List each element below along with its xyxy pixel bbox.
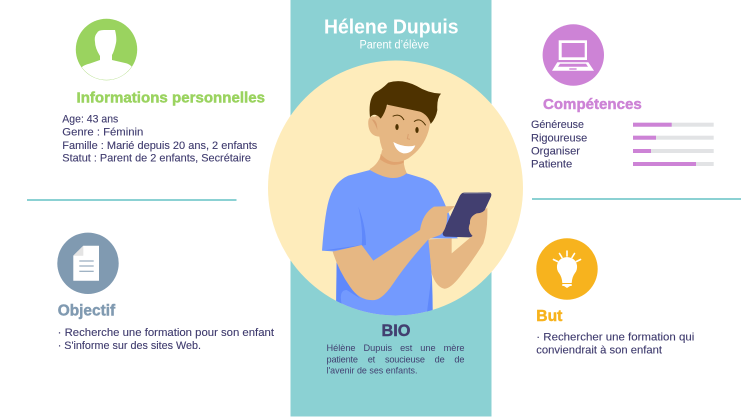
skill rows (531, 119, 714, 171)
tablet (443, 192, 491, 237)
skill: Patiente: Patiente (531, 159, 572, 171)
smile (393, 142, 415, 153)
skill: Organiser: Organiser (531, 146, 580, 158)
left arm (333, 206, 455, 300)
icon: light bulb (536, 238, 598, 300)
text: objective bullets (58, 327, 274, 352)
text: personal details (62, 113, 258, 165)
text: personal details: Statut : Parent de 2 enfants, Secrétaire (62, 153, 251, 165)
text: bio description: Hélène Dupuis est une mère (326, 343, 464, 353)
text: bio description: patiente et soucieuse de de (326, 354, 464, 364)
neck (369, 150, 408, 179)
panel: personal information (62, 19, 265, 165)
panel: central teal column (290, 0, 492, 416)
skill: Généreuse: Généreuse (531, 119, 584, 131)
text: bio description: l'avenir de ses enfants. (326, 366, 418, 376)
illustration: smiling person holding tablet (322, 81, 491, 320)
icon: laptop (543, 24, 604, 86)
eyes and brows (395, 124, 399, 130)
skill: Organiser (531, 146, 714, 158)
text: bio description (326, 343, 464, 376)
panel: goal (536, 238, 694, 357)
skill: Rigoureuse: Rigoureuse (531, 132, 587, 144)
skill: Généreuse (531, 119, 714, 131)
cream portrait circle (268, 60, 523, 316)
text: goal description (536, 332, 694, 357)
text: personal details: Famille : Marié depuis 20 ans, 2 enfants (62, 140, 258, 152)
text: objective bullets: · Recherche une formation pour son enfant (58, 327, 274, 339)
heading: persona name: Hélene Dupuis (324, 16, 458, 38)
heading: BIO: BIO (382, 321, 410, 340)
heading: goal: But (536, 308, 563, 325)
icon: person silhouette (76, 19, 137, 84)
heading: objective: Objectif (58, 303, 116, 320)
text: goal description: conviendrait à son enfant (536, 345, 662, 357)
hair (370, 81, 441, 124)
panel: objective (57, 233, 274, 352)
head (368, 100, 430, 162)
right arm and hand (428, 208, 487, 289)
skill: Patiente (531, 159, 714, 171)
text: goal description: · Rechercher une formation qui (536, 332, 694, 344)
shirt (322, 170, 458, 320)
text: persona role: Parent d’élève (360, 40, 429, 52)
skill: Rigoureuse (531, 132, 714, 144)
heading: skills: Compétences (543, 96, 642, 113)
text: personal details: Age: 43 ans (62, 113, 119, 125)
text: objective bullets: · S'informe sur des sites Web. (58, 340, 201, 352)
fingers over tablet (468, 208, 488, 236)
heading: personal information: Informations personnelles (76, 90, 265, 107)
panel: skills (531, 24, 714, 171)
text: personal details: Genre : Féminin (62, 127, 143, 139)
icon: document (57, 233, 119, 294)
